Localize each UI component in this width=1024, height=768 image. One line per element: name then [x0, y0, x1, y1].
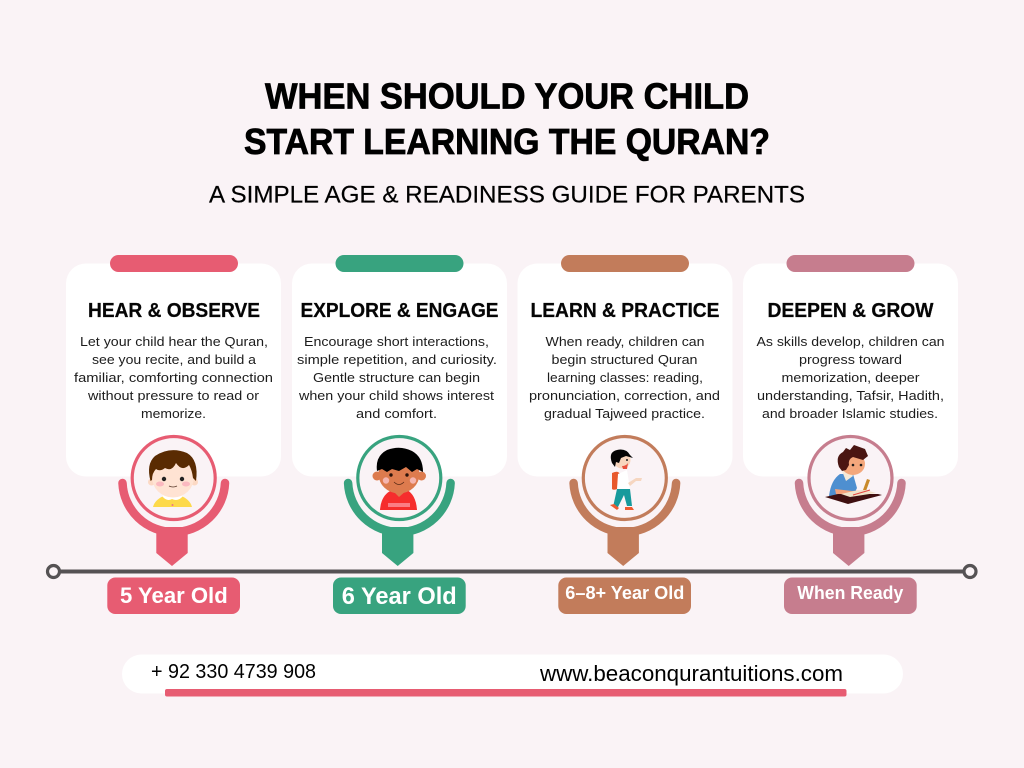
age label: when ready: When Ready [797, 583, 903, 603]
icon: fair-skinned boy in yellow shirt [148, 450, 198, 507]
title [244, 75, 770, 162]
body text [297, 334, 497, 421]
body text: memorization, deeper [782, 370, 920, 385]
body text: Let your child hear the Quran, [80, 334, 268, 349]
body text: Encourage short interactions, [304, 334, 489, 349]
heading: DEEPEN & GROW [768, 300, 934, 322]
panel: hear and observe [66, 255, 281, 476]
body text: As skills develop, children can [756, 334, 944, 349]
accent underline [165, 689, 846, 696]
body text: learning classes: reading, [547, 370, 703, 385]
body text: and comfort. [356, 406, 437, 421]
body text: progress toward [799, 352, 902, 367]
accent tab [336, 255, 464, 272]
website: www.beaconqurantuitions.com [539, 661, 843, 686]
heading: LEARN & PRACTICE [530, 300, 720, 322]
body text: begin structured Quran [552, 352, 698, 367]
title: WHEN SHOULD YOUR CHILD [265, 75, 749, 116]
body text: without pressure to read or [87, 388, 260, 403]
heading: HEAR & OBSERVE [88, 300, 260, 322]
marker: 6 to 8 year old [107, 436, 917, 696]
age label: 6 year old [333, 578, 466, 614]
accent tab [110, 255, 238, 272]
body text [74, 334, 273, 421]
body text: memorize. [141, 406, 206, 421]
accent tab [786, 255, 914, 272]
body text: Gentle structure can begin [313, 370, 480, 385]
panel: learn and practice [518, 255, 732, 476]
body text: When ready, children can [546, 334, 704, 349]
marker: 6 year old [107, 436, 917, 696]
body text [529, 334, 720, 421]
age label: when ready [784, 578, 917, 614]
body text: familiar, comforting connection [74, 370, 273, 385]
marker: 5 year old [107, 436, 917, 696]
age label: 6 year old: 6 Year Old [342, 583, 457, 610]
body text: and broader Islamic studies. [762, 406, 938, 421]
panel: explore and engage [292, 255, 507, 476]
heading: EXPLORE & ENGAGE [300, 300, 498, 322]
panel: deepen and grow [743, 255, 958, 476]
body text: when your child shows interest [298, 388, 494, 403]
phone number: + 92 330 4739 908 [151, 661, 316, 683]
body text: simple repetition, and curiosity. [297, 352, 497, 367]
icon: boy writing at desk [825, 445, 882, 504]
age label: 6 to 8 year old: 6–8+ Year Old [565, 583, 684, 603]
body text [756, 334, 944, 421]
icon: dark-haired boy in red shirt [372, 448, 426, 510]
contact bar [122, 654, 903, 696]
body text: understanding, Tafsir, Hadith, [757, 388, 944, 403]
accent tab [561, 255, 689, 272]
age label: 5 year old: 5 Year Old [120, 583, 228, 608]
age label: 6 to 8 year old [558, 578, 691, 614]
icon: walking boy with backpack [610, 450, 642, 510]
body text: gradual Tajweed practice. [544, 406, 705, 421]
title: START LEARNING THE QURAN? [244, 121, 770, 162]
timeline [48, 566, 976, 578]
subtitle: A SIMPLE AGE & READINESS GUIDE FOR PARENTS [209, 182, 805, 208]
body text: see you recite, and build a [92, 352, 257, 367]
marker: when ready [107, 436, 917, 696]
body text: pronunciation, correction, and [529, 388, 720, 403]
age label: 5 year old [107, 578, 240, 614]
